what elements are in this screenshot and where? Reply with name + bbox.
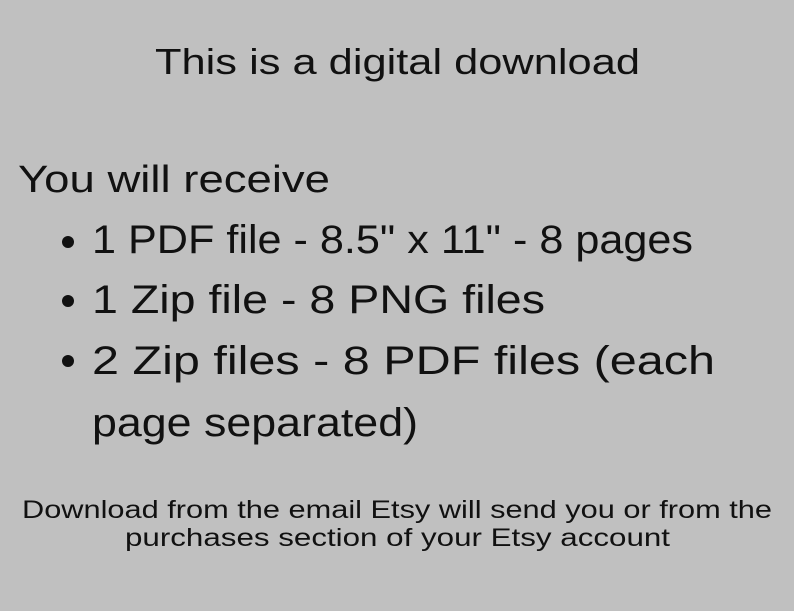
footer note [22, 496, 772, 552]
footer note: Download from the email Etsy will send you or from the [22, 496, 772, 524]
bullet 1: 1 PDF file - 8.5" x 11" - 8 pages [92, 218, 693, 262]
bullet 2: 1 Zip file - 8 PNG files [92, 278, 545, 322]
bullet list [62, 218, 715, 445]
footer note: purchases section of your Etsy account [125, 524, 670, 552]
bullet 3: page separated) [92, 401, 418, 445]
title: This is a digital download [155, 41, 640, 82]
subheading: you will receive: You will receive [18, 159, 330, 201]
bullet 3: 2 Zip files - 8 PDF files (each [92, 339, 715, 383]
bullet 3 [62, 339, 715, 445]
